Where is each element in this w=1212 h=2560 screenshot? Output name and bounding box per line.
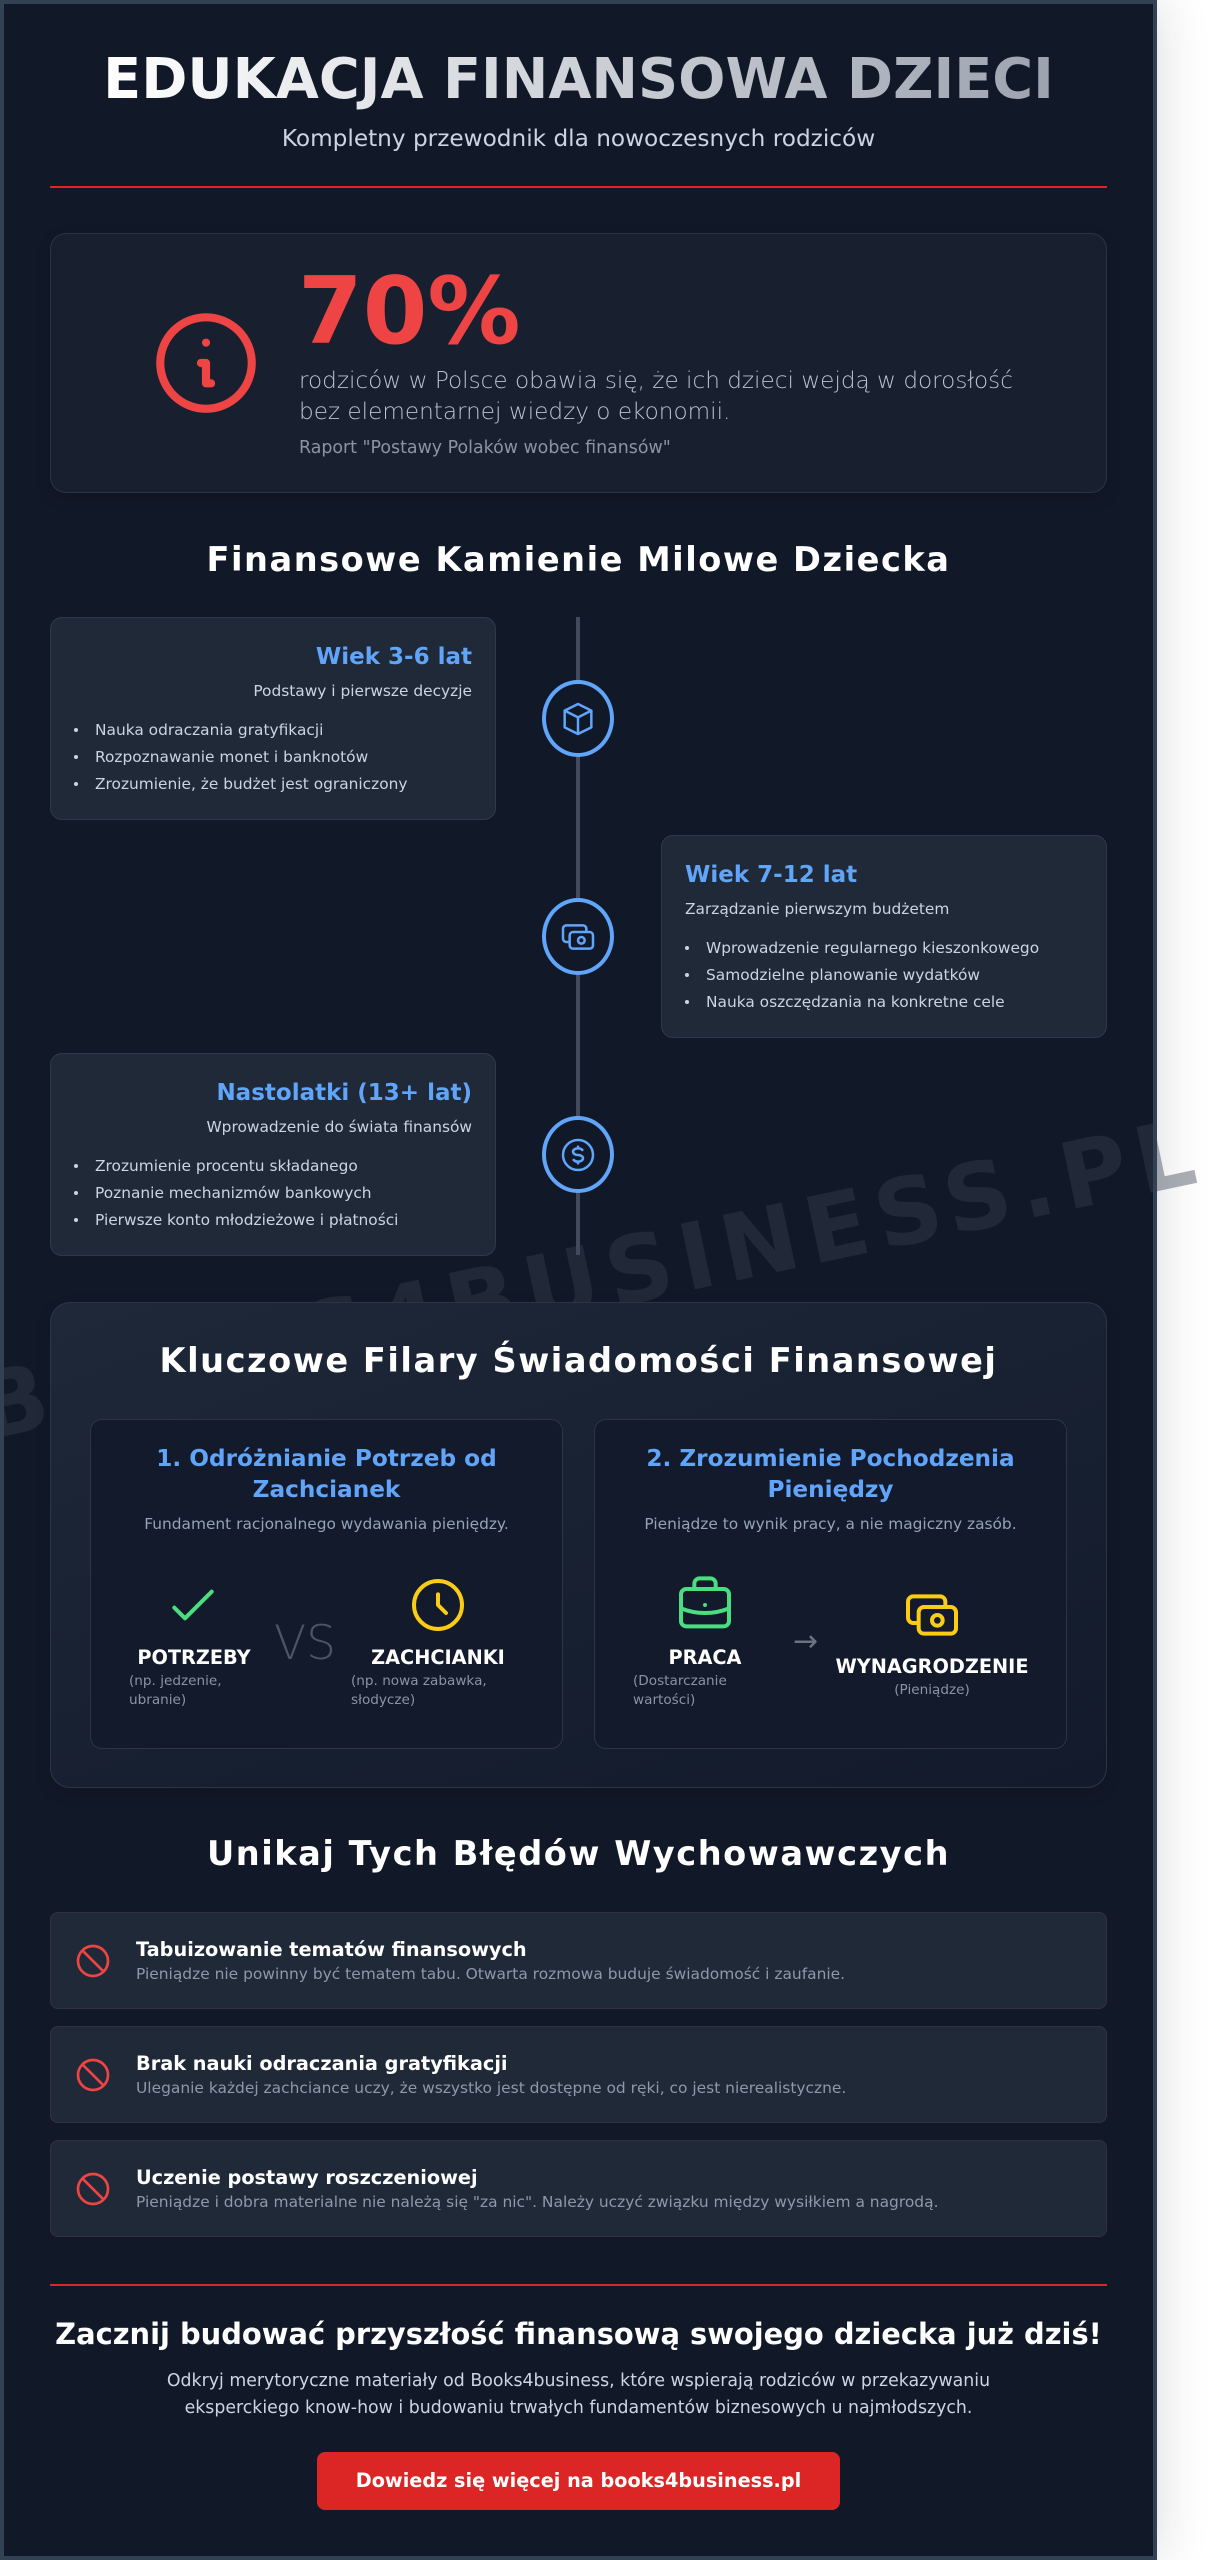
label: salary: WYNAGRODZENIE (836, 1655, 1028, 1678)
watermark: BOOKS4BUSINESS.PL (0, 1097, 1212, 1462)
timeline line (576, 617, 580, 1255)
mistake title: Tabuizowanie tematów finansowych (136, 1938, 527, 1961)
wants example: słodycze) (351, 1692, 415, 1708)
heading: mistakes: Unikaj Tych Błędów Wychowawczych (207, 1834, 950, 1873)
panel: age 7-12 (661, 835, 1107, 1038)
label: work: PRACA (668, 1646, 741, 1669)
versus label: VS (274, 1616, 336, 1671)
pillar 2 card (594, 1419, 1067, 1749)
card subtitle: Zarządzanie pierwszym budżetem (685, 900, 949, 918)
icon: ban (76, 1944, 110, 1978)
icon: check (172, 1590, 214, 1620)
icon: dollar (562, 1138, 594, 1172)
pillar 1 heading: 1. Odróżnianie Potrzeb od (156, 1445, 497, 1472)
icon: cube (563, 702, 593, 736)
pillar 2 heading: 2. Zrozumienie Pochodzenia (646, 1445, 1015, 1472)
pillar 1 card (90, 1419, 563, 1749)
needs example: (np. jedzenie, (129, 1673, 222, 1689)
icon: info (156, 313, 256, 413)
call to action text: Odkryj merytoryczne materiały od Books4business, które wspierają rodziców w przekazywaniu (167, 2371, 990, 2391)
icon: briefcase (678, 1576, 731, 1628)
bullet list (74, 1157, 398, 1229)
pillar 2 heading (646, 1445, 1015, 1503)
statistic description: rodziców w Polsce obawia się, że ich dzieci wejdą w dorosłość (299, 368, 1013, 394)
bullet list: Nauka odraczania gratyfikacji (95, 721, 323, 739)
salary explanation: (Pieniądze) (894, 1682, 970, 1698)
mistake description: Pieniądze i dobra materialne nie należą się "za nic". Należy uczyć związku między wysiłkiem a nagrodą. (136, 2193, 938, 2211)
icon: cash (562, 924, 594, 950)
subtitle: Kompletny przewodnik dla nowoczesnych rodziców (282, 125, 875, 152)
card heading: Wiek 7-12 lat (685, 862, 857, 888)
bullet list (685, 939, 1039, 1011)
panel: pillars (50, 1302, 1107, 1788)
bullet list: Samodzielne planowanie wydatków (706, 966, 980, 984)
mistake card 3 (50, 2140, 1107, 2237)
call to action heading: Zacznij budować przyszłość finansową swojego dziecka już dziś! (55, 2317, 1102, 2351)
card subtitle: Wprowadzenie do świata finansów (206, 1118, 472, 1136)
label: wants: ZACHCIANKI (371, 1646, 505, 1669)
pillar 2 heading: Pieniędzy (767, 1476, 894, 1503)
bullet list: Poznanie mechanizmów bankowych (95, 1184, 372, 1202)
mistake description: Pieniądze nie powinny być tematem tabu. Otwarta rozmowa buduje świadomość i zaufanie. (136, 1965, 845, 1983)
panel: age 3-6 (50, 617, 496, 820)
timeline node: dollar (542, 1116, 614, 1193)
bullet list: Nauka oszczędzania na konkretne cele (706, 993, 1005, 1011)
arrow: → (793, 1624, 818, 1659)
bullet list: Wprowadzenie regularnego kieszonkowego (706, 939, 1039, 957)
icon: ban (76, 2172, 110, 2206)
title: EDUKACJA FINANSOWA DZIECI (103, 47, 1054, 112)
work explanation: (Dostarczanie (633, 1673, 727, 1689)
wants example (351, 1673, 487, 1708)
work explanation: wartości) (633, 1692, 695, 1708)
card heading: Wiek 3-6 lat (316, 644, 472, 670)
needs example (129, 1673, 222, 1708)
bullet list: Pierwsze konto młodzieżowe i płatności (95, 1211, 398, 1229)
statistic source: Raport "Postawy Polaków wobec finansów" (299, 438, 671, 458)
bullet list: Rozpoznawanie monet i banknotów (95, 748, 368, 766)
footer divider (50, 2284, 1107, 2286)
call to action button (317, 2452, 840, 2510)
bullet list (74, 721, 408, 793)
bullet list: Zrozumienie procentu składanego (95, 1157, 358, 1175)
statistic number: 70% (298, 257, 521, 365)
pillar 2 description: Pieniądze to wynik pracy, a nie magiczny zasób. (644, 1515, 1017, 1533)
call to action button: Dowiedz się więcej na books4business.pl (356, 2469, 801, 2492)
mistake title: Uczenie postawy roszczeniowej (136, 2166, 478, 2189)
needs example: ubranie) (129, 1692, 186, 1708)
panel: teenagers (50, 1053, 496, 1256)
pillar 1 heading: Zachcianek (253, 1476, 400, 1503)
mistake title: Brak nauki odraczania gratyfikacji (136, 2052, 508, 2075)
statistic description: bez elementarnej wiedzy o ekonomii. (299, 399, 730, 425)
statistic description (299, 368, 1013, 425)
bullet list: Zrozumienie, że budżet jest ograniczony (95, 775, 408, 793)
mistake card 1 (50, 1912, 1107, 2009)
icon: clock (412, 1579, 464, 1631)
heading: milestones: Finansowe Kamienie Milowe Dziecka (206, 540, 950, 579)
icon: ban (76, 2058, 110, 2092)
label: needs: POTRZEBY (137, 1646, 251, 1669)
card heading: Nastolatki (13+ lat) (216, 1080, 472, 1106)
call to action text (167, 2371, 990, 2418)
header divider (50, 186, 1107, 188)
pillar 1 heading (156, 1445, 497, 1503)
work explanation (633, 1673, 727, 1708)
mistake card 2 (50, 2026, 1107, 2123)
icon: money (906, 1594, 958, 1636)
panel: key statistic (50, 233, 1107, 493)
card subtitle: Podstawy i pierwsze decyzje (253, 682, 472, 700)
timeline node: cash (542, 898, 614, 975)
pillar 1 description: Fundament racjonalnego wydawania pieniędzy. (144, 1515, 509, 1533)
timeline node: cube (542, 680, 614, 757)
wants example: (np. nowa zabawka, (351, 1673, 487, 1689)
call to action text: eksperckiego know-how i budowaniu trwałych fundamentów biznesowych u najmłodszych. (185, 2398, 972, 2418)
pillars heading: Kluczowe Filary Świadomości Finansowej (160, 1341, 997, 1380)
mistake description: Uleganie każdej zachciance uczy, że wszystko jest dostępne od ręki, co jest nierealistyczne. (136, 2079, 846, 2097)
